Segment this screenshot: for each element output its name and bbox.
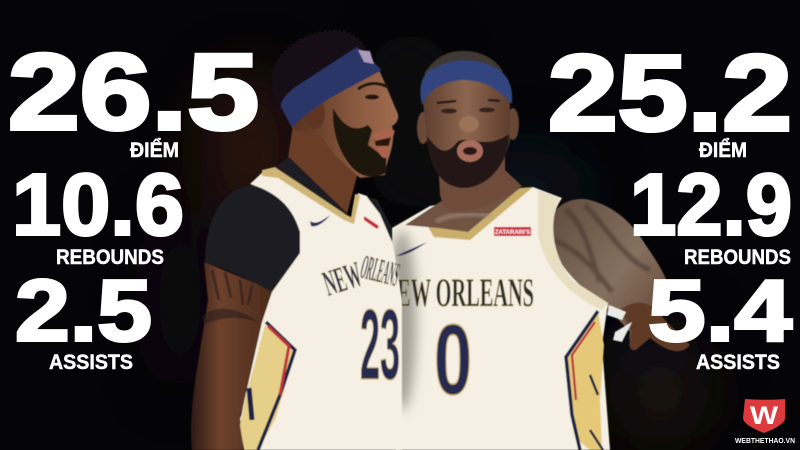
eye and brow [358,83,388,100]
logo swoosh [396,242,427,256]
logo wordmark: WEBTHETHAO.VN [735,438,795,445]
stat: 25.2 points: ĐIỂM [699,139,747,162]
beard [333,108,387,177]
jersey neck trim [425,187,533,240]
stat: 5.4 assists: 5.4 [648,262,792,360]
sponsor patch [364,216,379,229]
left player's headband [281,47,382,128]
beard [427,134,509,188]
text: ORLEANS [357,249,403,294]
right player's headband [420,60,512,105]
stat: 2.5 assists: 2.5 [15,262,152,360]
left player's arm [191,262,272,450]
mouth [373,129,395,158]
left player's neck [288,125,358,214]
right player's jersey [388,187,610,450]
jersey number 0: 0 [434,304,472,416]
stat: 10.6 rebounds: REBOUNDS [56,246,164,269]
left player's black undershirt [205,186,300,292]
stat: 26.5 points: 26.5 [8,31,259,152]
logo: webthethao.vn [735,399,795,445]
sponsor patch [494,227,531,236]
sponsor patch: ZATARAIN'S [495,230,530,236]
text: 23 [360,289,400,401]
right player's neck and head [417,51,522,211]
eyes and nose [437,100,500,132]
shadow from the other player [388,230,416,410]
jersey lettering: NEW [318,254,367,304]
ear [305,99,325,129]
stat: 10.6 rebounds: 10.6 [12,156,184,254]
hair [424,51,503,74]
stat: 2.5 assists: ASSISTS [49,351,133,374]
jersey lettering: EW ORLEANS [397,270,534,315]
stats: right player [548,32,792,374]
stats: left player [8,31,259,374]
logo W mark: W [750,402,778,430]
arm tattoo [202,270,258,325]
player: number 0 (right) [388,51,690,450]
icon: red shield [743,399,785,433]
stat: 26.5 points: ĐIỂM [130,139,179,162]
player: number 23 (left) [191,31,403,450]
mouthguard [607,305,632,342]
black collar [276,157,392,242]
stat: 12.9 rebounds: 12.9 [630,156,792,254]
right player's arm [548,199,690,351]
jersey neck trim [262,167,360,224]
logo swoosh [310,215,330,226]
hair [272,31,364,108]
left player's head [294,62,398,178]
stat: 25.2 points: 25.2 [548,32,792,153]
ears [417,112,429,144]
side panel stripes [240,322,296,450]
left player's jersey [240,170,402,450]
side panel stripes [565,311,604,450]
stat: 5.4 assists: ASSISTS [696,351,780,374]
mouth [457,140,483,162]
